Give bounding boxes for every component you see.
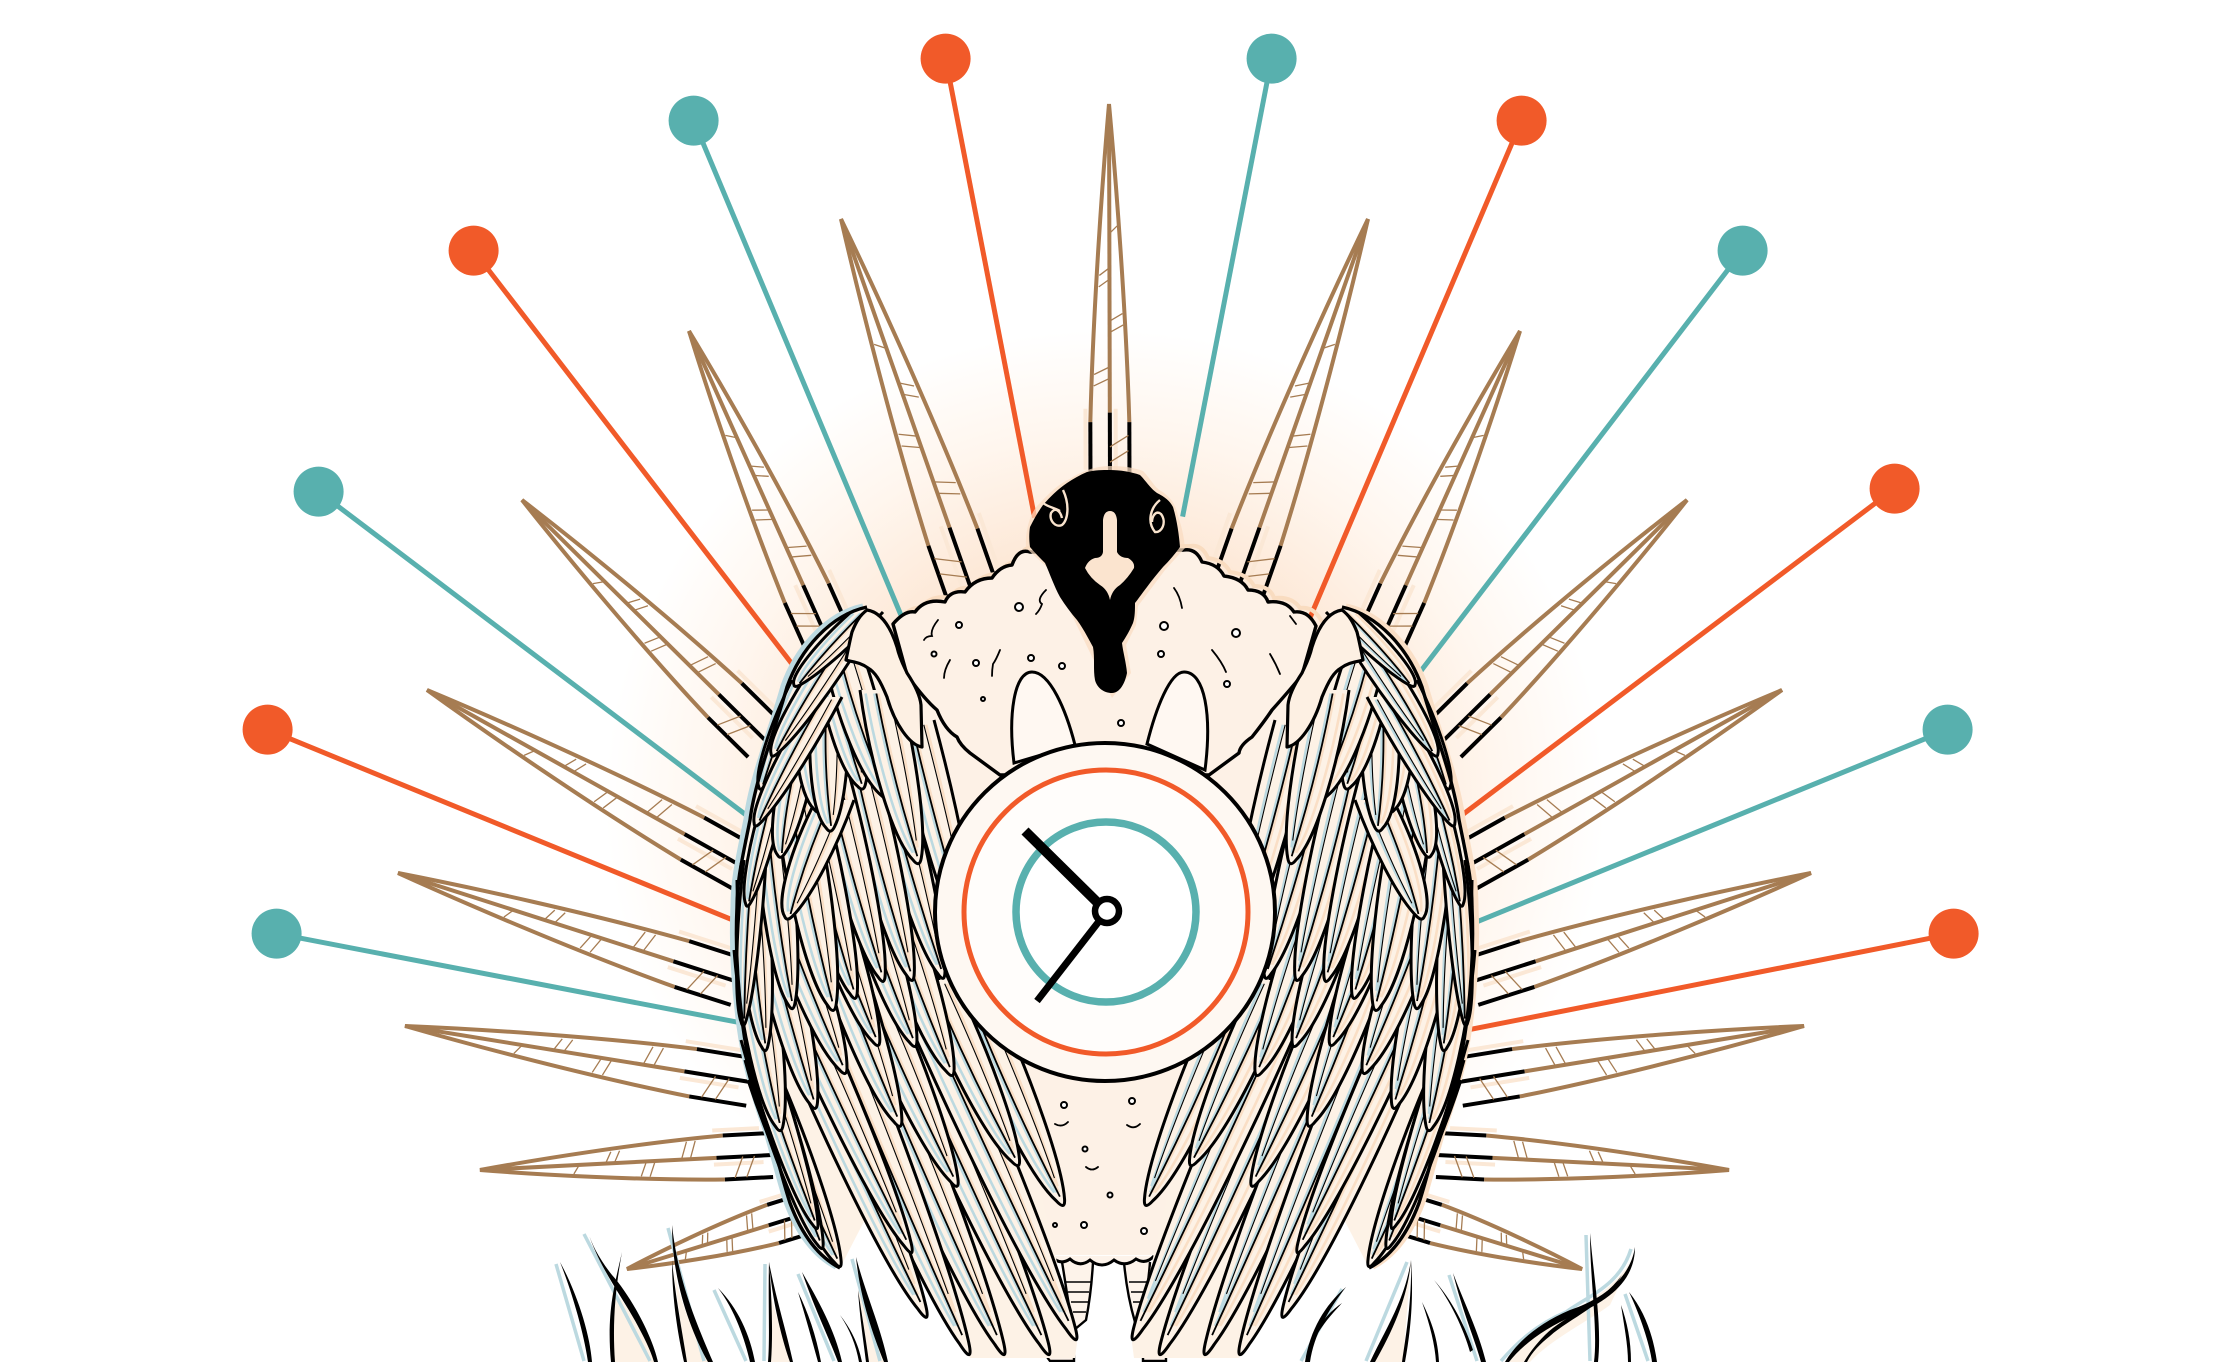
grass: pale blade fill: [612, 1255, 1634, 1362]
pin: teal mid-upper right: [1420, 226, 1768, 673]
pin: teal upper left: [669, 96, 902, 617]
head: peach halo: [1026, 466, 1185, 698]
legs: [1036, 1262, 1166, 1361]
pin: teal lower right: [1473, 705, 1973, 924]
body: speckles: [924, 588, 1296, 1234]
clock: teal ring: [1016, 822, 1196, 1002]
body: tail scallop edge: [1051, 1256, 1154, 1265]
head: right eye curl: [1150, 500, 1164, 532]
wing: secondary feathers: [732, 720, 994, 1131]
clock: hands: [1025, 831, 1119, 1001]
grass: blade shadows: [556, 1228, 1648, 1361]
body: arch left: [1012, 672, 1075, 763]
pin lines and pin heads: [243, 34, 1979, 1030]
wing: silhouette fill: [736, 607, 1077, 1358]
wing: median coverts: [731, 760, 961, 1026]
head: black shape: [1029, 470, 1180, 693]
bird body: [893, 546, 1322, 1361]
pin: orange bottom right: [1470, 909, 1979, 1030]
pin: orange lower left: [243, 705, 737, 922]
quills: left side: [391, 208, 1006, 1288]
grass: black blades: [560, 1225, 1657, 1362]
quill: centre: [1085, 104, 1130, 485]
pin: orange upper right: [1310, 96, 1547, 619]
body: shoulders and mantle: [893, 550, 1316, 775]
wing: shoulder patch: [846, 610, 922, 747]
tail quills fan: [391, 104, 1818, 1288]
wing: lesser coverts: [735, 660, 938, 919]
wing: primary feathers: [739, 900, 1099, 1355]
background glow: [605, 330, 1605, 1270]
head: [1026, 466, 1185, 698]
left wing: [731, 606, 1099, 1358]
wing: ink offset outline: [732, 606, 863, 1267]
quills: right side: [1203, 208, 1818, 1288]
pin: teal bottom left: [252, 909, 740, 1023]
clock: orange ring: [964, 770, 1248, 1054]
wing: alula feathers: [739, 612, 883, 826]
body: shoulders peach offset: [899, 546, 1322, 622]
clock: [935, 743, 1275, 1081]
wing: outer edge line: [736, 607, 867, 1268]
right wing: [1110, 606, 1478, 1358]
head: left eye curl: [1043, 490, 1067, 526]
body: central fill behind clock: [900, 680, 1310, 1255]
clock: face: [935, 743, 1275, 1081]
grass blades: [556, 1225, 1657, 1362]
pin: teal top right: [1183, 34, 1297, 517]
pin: orange top left: [921, 34, 1035, 518]
pin: orange middle right: [1463, 464, 1920, 815]
pin: teal middle left: [294, 467, 750, 818]
body: arch right: [1147, 672, 1208, 770]
head: keyhole marking: [1085, 511, 1134, 600]
pin: orange mid-upper left: [449, 226, 796, 669]
